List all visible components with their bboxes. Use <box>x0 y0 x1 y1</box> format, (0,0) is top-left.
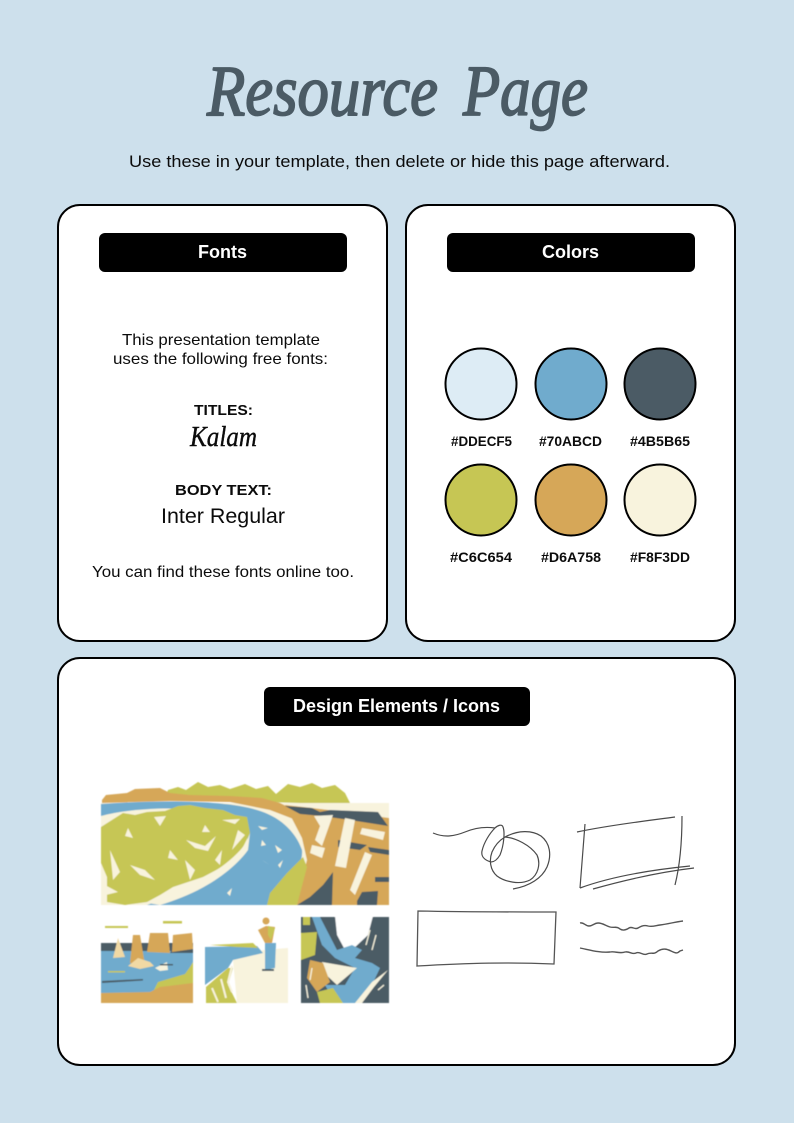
text block: body font: BODY TEXT: <box>175 482 272 499</box>
illustration: river canyon <box>101 782 389 905</box>
panel: fonts <box>58 205 387 641</box>
text block: body font <box>161 482 285 528</box>
heading: design elements: Design Elements / Icons <box>293 696 500 716</box>
text block: intro: uses the following free fonts: <box>113 351 328 368</box>
title: Resource <box>206 51 438 131</box>
swatch: 70ABCD: #70ABCD <box>539 434 602 449</box>
text block: note: You can find these fonts online too. <box>92 564 354 581</box>
title: Page <box>462 51 588 131</box>
swatch: 70ABCD <box>536 348 606 449</box>
swatch: C6C654: #C6C654 <box>450 550 513 565</box>
text block: title font <box>189 402 257 453</box>
text block: title font: TITLES: <box>194 402 253 419</box>
swatch: 4B5B65: #4B5B65 <box>630 434 691 449</box>
swatch: DDECF5: #DDECF5 <box>451 434 512 449</box>
sketch: rectangle <box>417 911 556 966</box>
sketch: wavy line top <box>580 921 683 930</box>
text block: title font: Kalam <box>189 421 257 453</box>
sketch: wavy line bottom <box>580 948 683 954</box>
illustration: sea stacks <box>101 921 193 1003</box>
text block: intro: This presentation template <box>122 332 320 349</box>
swatch: 4B5B65 <box>624 348 696 449</box>
title <box>206 51 588 131</box>
sketch: crossed rectangle <box>577 816 694 889</box>
swatch: D6A758 <box>536 464 606 565</box>
panel: colors <box>406 205 735 641</box>
illustration: waterfall <box>301 916 389 1003</box>
heading: fonts: Fonts <box>198 242 247 262</box>
subtitle: Use these in your template, then delete or hide this page afterward. <box>129 152 670 171</box>
text block: body font: Inter Regular <box>161 505 285 528</box>
panel: design elements <box>58 658 735 1065</box>
swatch: F8F3DD <box>624 464 696 565</box>
heading: design elements <box>264 687 530 726</box>
illustration: hiker on cliff <box>205 918 288 1003</box>
swatch: DDECF5 <box>446 348 516 449</box>
heading: fonts <box>99 233 347 272</box>
swatch: D6A758: #D6A758 <box>541 550 602 565</box>
heading: colors: Colors <box>542 242 599 262</box>
heading: colors <box>447 233 695 272</box>
swatch: C6C654 <box>446 464 516 565</box>
sketch: scribble <box>433 825 550 889</box>
swatch: F8F3DD: #F8F3DD <box>630 550 690 565</box>
text block: intro <box>113 332 328 368</box>
